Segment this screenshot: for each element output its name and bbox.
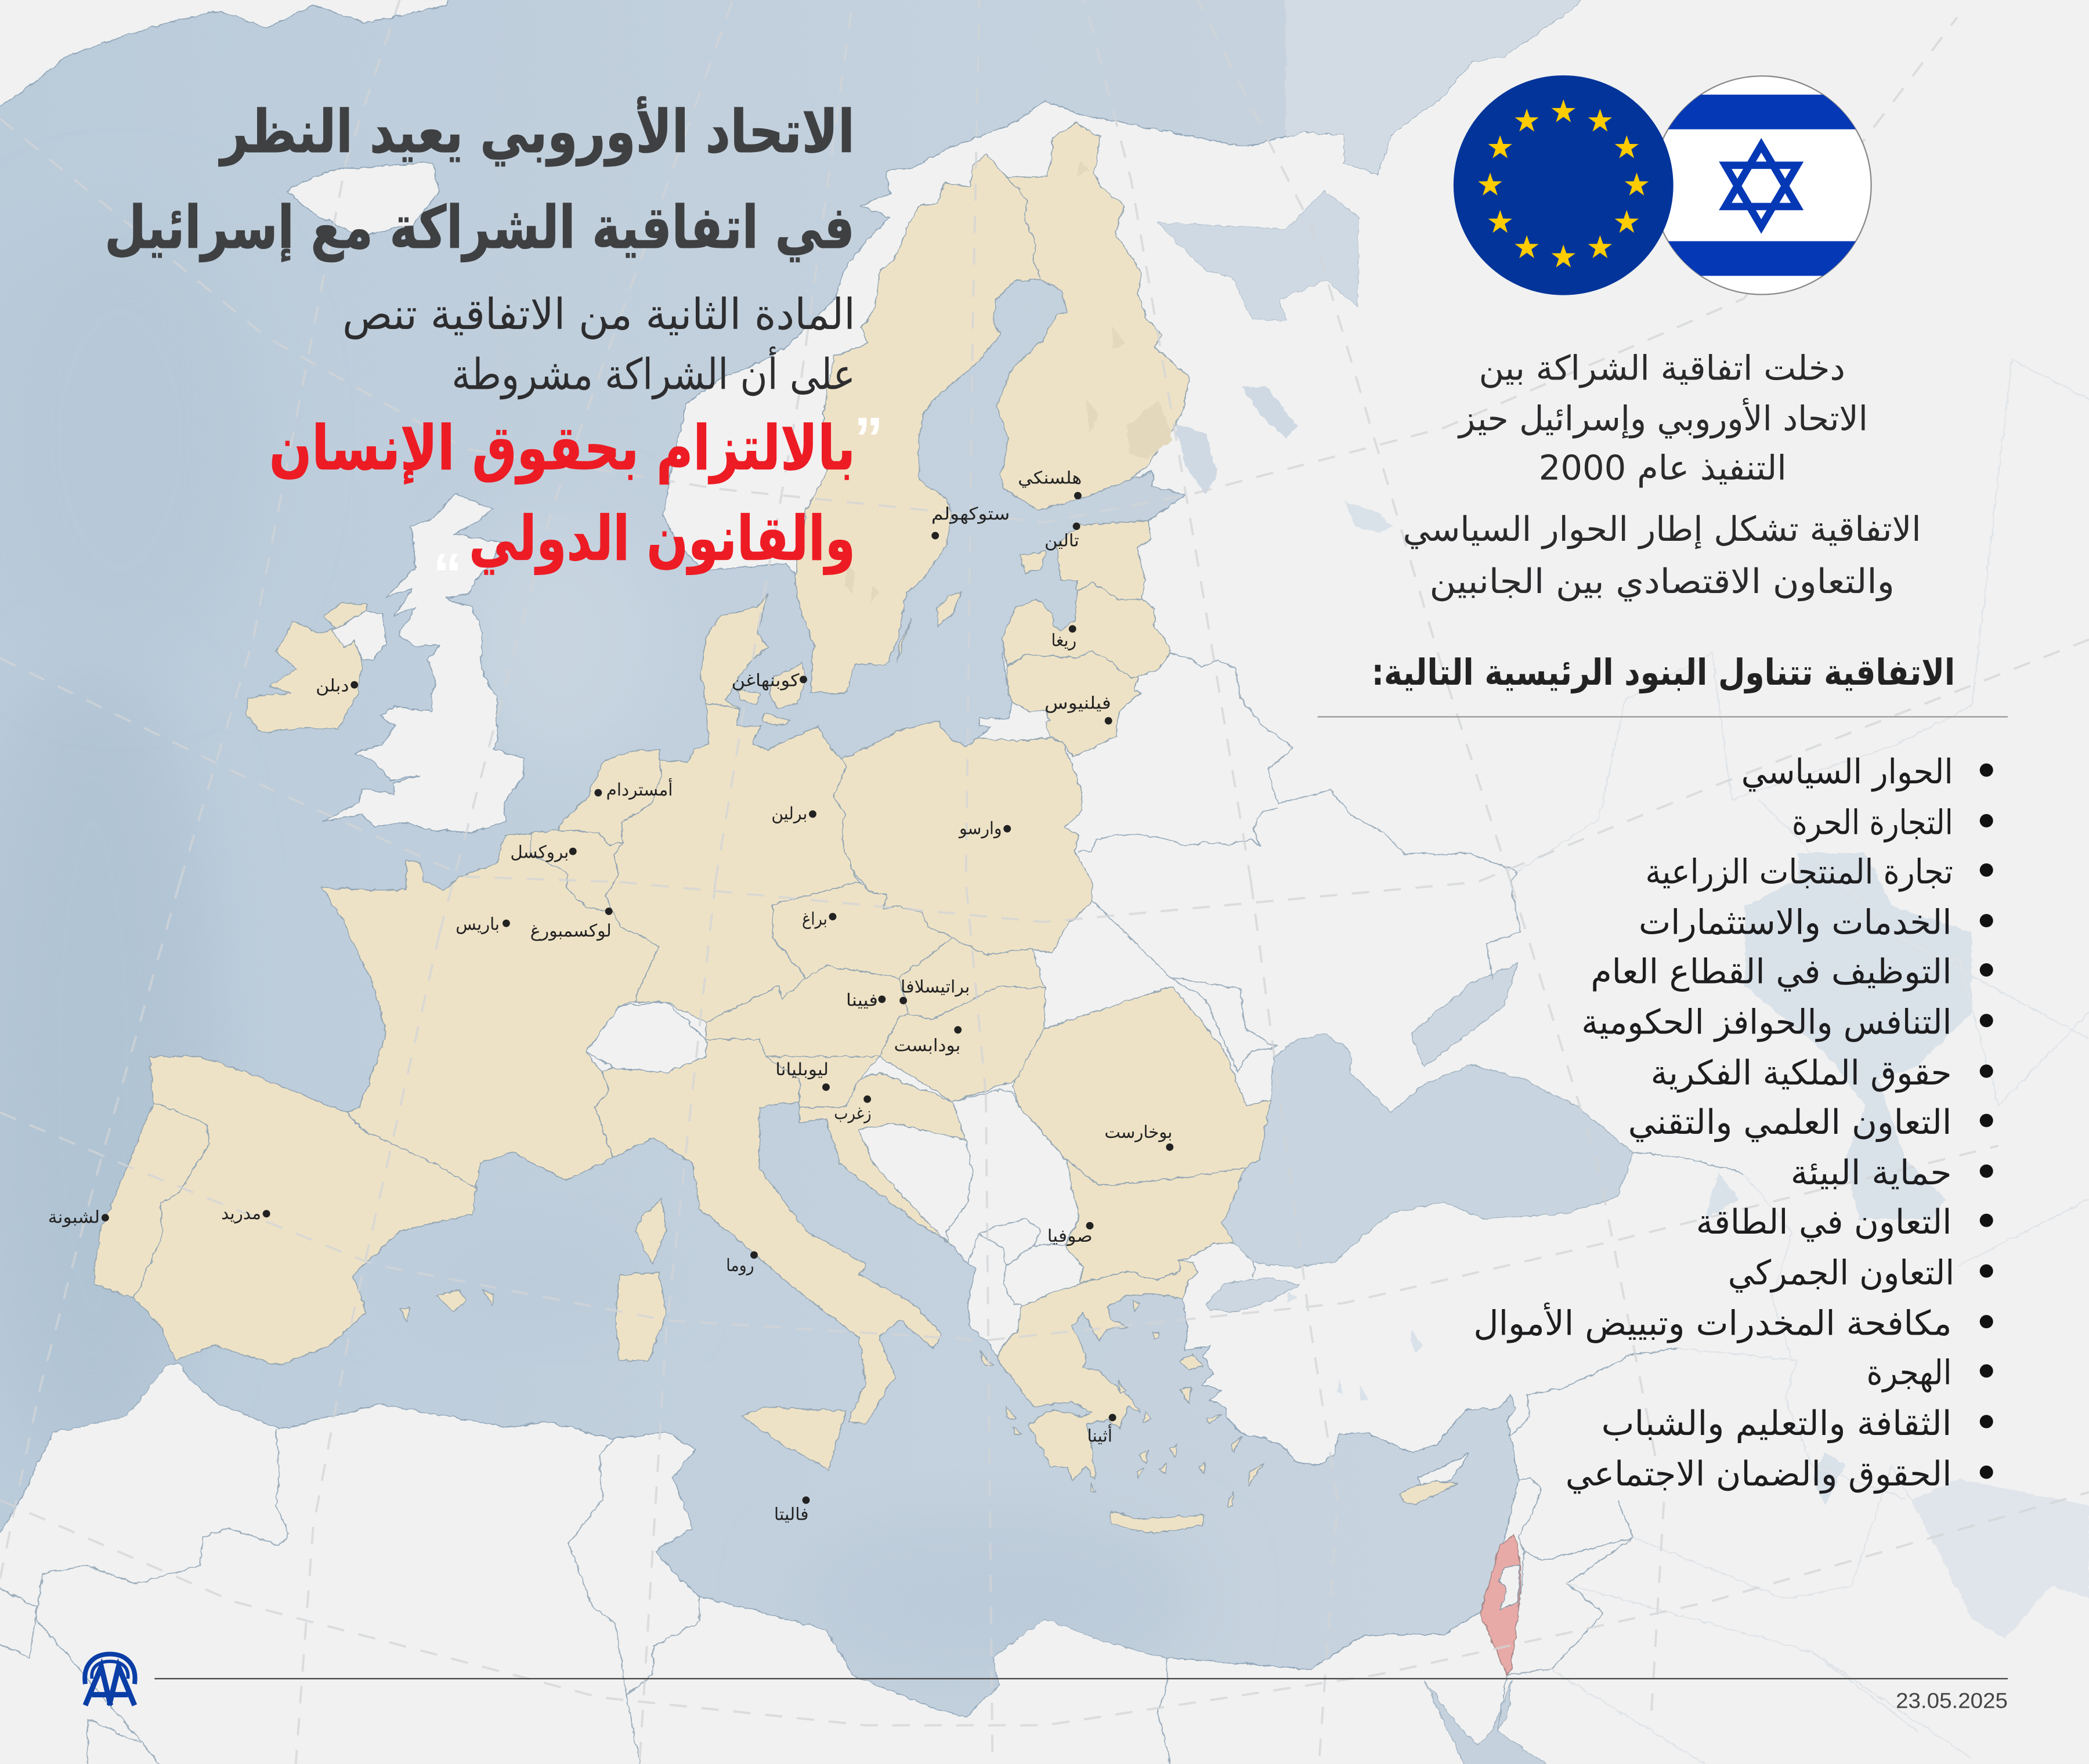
bulleted list: التجارة الحرة <box>1792 803 1953 843</box>
intro paragraph: الاتحاد الأوروبي وإسرائيل حيز <box>1457 398 1868 439</box>
map: borders of non-EU countries <box>0 360 2089 1764</box>
second paragraph: والتعاون الاقتصادي بين الجانبين <box>1430 562 1895 602</box>
bulleted list: حماية البيئة <box>1791 1153 1952 1192</box>
North Cyprus <box>1419 1454 1469 1485</box>
city markers and labels: أثينا <box>1087 1423 1112 1446</box>
bulleted list: مكافحة المخدرات وتبييض الأموال <box>1473 1303 1952 1344</box>
Croatia <box>800 1072 966 1242</box>
city markers and labels: ستوكهولم <box>931 504 1010 525</box>
map: EU member states <box>93 122 1458 1534</box>
city markers and labels: لوكسمبورغ <box>530 921 612 941</box>
Germany <box>606 703 859 1022</box>
footer line <box>154 1678 2008 1679</box>
Lithuania <box>1007 650 1142 757</box>
map: non-EU islands <box>287 162 1469 1485</box>
Bulgaria <box>1064 1159 1244 1283</box>
subtitle <box>342 290 855 400</box>
Latvia <box>1002 582 1170 677</box>
city markers and labels: لشبونة <box>48 1208 100 1228</box>
Belgium and Luxembourg <box>529 830 622 913</box>
city markers and labels <box>48 468 1173 1525</box>
France <box>321 833 659 1188</box>
title <box>104 96 855 262</box>
Portugal <box>93 1102 209 1297</box>
city markers and labels: بودابست <box>894 1036 960 1056</box>
city markers and labels: زغرب <box>834 1104 872 1124</box>
Romania <box>1013 986 1271 1185</box>
city markers and labels: براغ <box>802 909 827 929</box>
Finland <box>996 122 1190 510</box>
subtitle: المادة الثانية من الاتفاقية تنص <box>342 290 855 339</box>
Iceland <box>287 162 440 236</box>
bulleted list: الثقافة والتعليم والشباب <box>1602 1404 1952 1444</box>
city markers and labels: باريس <box>456 914 500 935</box>
second paragraph <box>1403 509 1921 602</box>
West Bank <box>1499 1566 1519 1610</box>
Greece <box>998 1260 1198 1480</box>
city markers and labels: هلسنكي <box>1018 468 1082 489</box>
city markers and labels: فيلنيوس <box>1044 693 1111 714</box>
highlighted quote <box>269 406 883 607</box>
date: 23.05.2025 <box>1896 1689 2008 1712</box>
Great Britain <box>324 493 523 833</box>
intro paragraph: دخلت اتفاقية الشراكة بين <box>1479 348 1845 388</box>
Poland <box>834 721 1093 955</box>
city markers and labels: كوبنهاغن <box>731 670 800 691</box>
Slovenia <box>766 1057 879 1107</box>
divider <box>1318 716 2008 717</box>
city markers and labels: فاليتا <box>774 1505 809 1525</box>
city markers and labels: أمستردام <box>606 778 673 800</box>
bulleted list: التعاون الجمركي <box>1728 1253 1954 1293</box>
map: Switzerland <box>586 1002 706 1072</box>
title: في اتفاقية الشراكة مع إسرائيل <box>104 193 855 262</box>
Hungary <box>879 986 1044 1102</box>
title: الاتحاد الأوروبي يعيد النظر <box>218 96 855 167</box>
map: Israel highlighted <box>1480 1535 1520 1675</box>
bulleted list: الحوار السياسي <box>1741 752 1953 792</box>
city markers and labels: مدريد <box>221 1203 261 1224</box>
Northern Ireland <box>332 610 386 660</box>
Denmark <box>701 594 806 726</box>
bulleted list: التوظيف في القطاع العام <box>1591 952 1952 992</box>
Mediterranean and Baltic EU islands <box>400 552 1458 1534</box>
bulleted list: الخدمات والاستثمارات <box>1639 903 1952 943</box>
EU lakes <box>845 160 1172 602</box>
Estonia <box>1057 521 1151 599</box>
bulleted list: الهجرة <box>1867 1353 1952 1393</box>
bulleted list: حقوق الملكية الفكرية <box>1651 1053 1952 1093</box>
flag: European Union <box>1454 75 1674 295</box>
Austria <box>706 966 909 1057</box>
highlighted quote: “ <box>433 542 462 607</box>
intro paragraph: التنفيذ عام 2000 <box>1539 449 1787 488</box>
bulleted list: الحقوق والضمان الاجتماعي <box>1566 1454 1952 1494</box>
city markers and labels: صوفيا <box>1047 1226 1093 1246</box>
Netherlands <box>558 750 661 846</box>
city markers and labels: دبلن <box>316 676 349 696</box>
icon: AA logo <box>85 1654 135 1705</box>
city markers and labels: ريغا <box>1051 631 1076 651</box>
city markers and labels: برلين <box>771 804 807 824</box>
city markers and labels: بوخارست <box>1104 1122 1172 1143</box>
bulleted list: تجارة المنتجات الزراعية <box>1645 852 1953 892</box>
Slovakia <box>899 938 1044 1019</box>
city markers and labels: بروكسل <box>510 843 569 863</box>
highlighted quote: ” <box>854 406 883 471</box>
bulleted list: التعاون في الطاقة <box>1696 1202 1952 1242</box>
Italy <box>595 1039 942 1424</box>
Czechia <box>773 882 953 978</box>
intro paragraph <box>1457 348 1868 488</box>
list heading: الاتفاقية تتناول البنود الرئيسية التالية: <box>1372 651 1955 693</box>
city markers and labels: براتيسلافا <box>901 977 970 997</box>
Ireland <box>247 603 366 733</box>
city markers and labels: روما <box>726 1255 754 1275</box>
Sweden <box>796 154 1042 693</box>
bulleted list <box>1473 752 1993 1494</box>
city markers and labels: ليوبليانا <box>775 1060 829 1080</box>
flag: Israel <box>1652 76 1872 295</box>
second paragraph: الاتفاقية تشكل إطار الحوار السياسي <box>1403 509 1921 550</box>
bulleted list: التنافس والحوافز الحكومية <box>1581 1003 1952 1043</box>
highlighted quote: والقانون الدولي <box>469 503 855 574</box>
Black Sea, Azov, Marmara, Red Sea, Gulf and lakes <box>1221 1034 1633 1267</box>
subtitle: على أن الشراكة مشروطة <box>451 346 855 400</box>
Spain <box>133 1057 476 1365</box>
city markers and labels: فيينا <box>846 991 878 1011</box>
city markers and labels: تالين <box>1044 530 1079 551</box>
city markers and labels: وارسو <box>958 818 1002 838</box>
bulleted list: التعاون العلمي والتقني <box>1628 1102 1952 1143</box>
highlighted quote: بالالتزام بحقوق الإنسان <box>269 412 855 484</box>
